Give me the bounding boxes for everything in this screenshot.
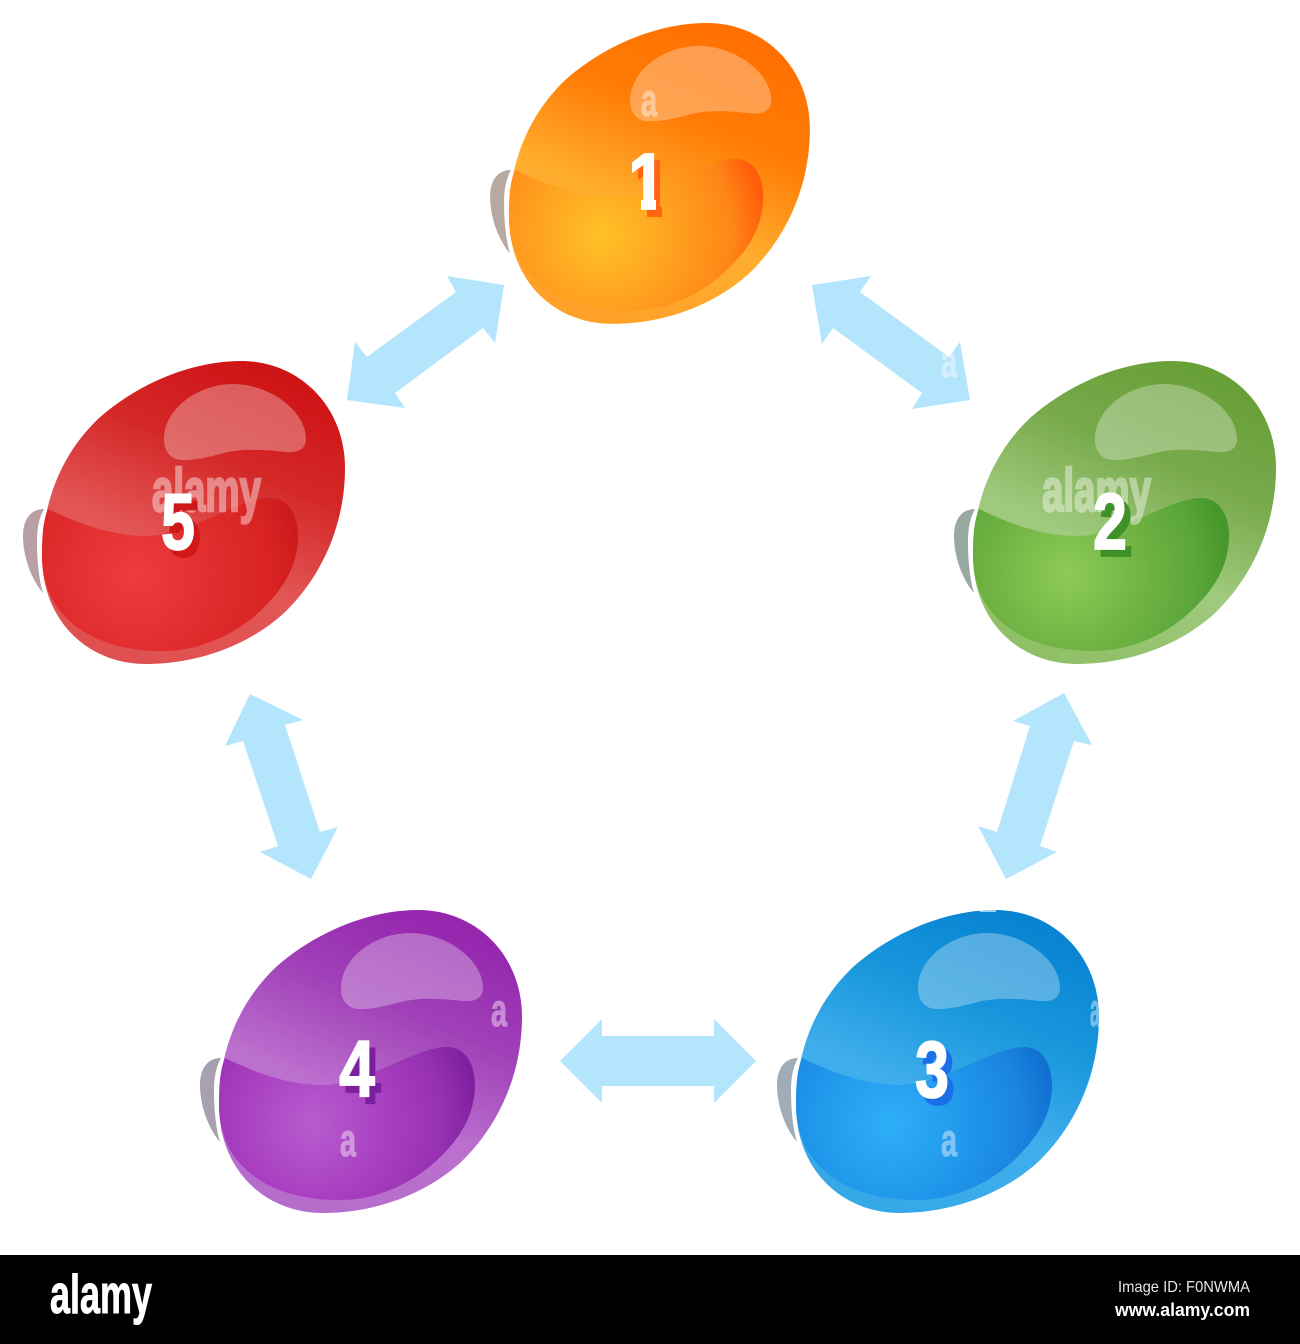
bubble 2: green: 2 <box>1099 485 1133 574</box>
bubble 4: purple <box>200 910 522 1213</box>
bubble 2: green: 2 <box>1093 478 1127 567</box>
bubble 4: purple: 4 <box>339 1024 375 1114</box>
bubble 3: blue: a <box>941 1114 957 1166</box>
bubble 4: purple: a <box>491 984 507 1036</box>
arrow: between 1 and 2 <box>812 276 970 409</box>
bubble 2: green <box>954 361 1276 664</box>
bubble 1: orange: a <box>641 74 657 126</box>
bubble 1: orange <box>490 23 810 324</box>
bubble 2: green: alamy <box>1042 457 1151 524</box>
bubble 4: purple: 4 <box>345 1031 381 1121</box>
bubble 3: blue: 3 <box>921 1033 955 1122</box>
bubble 3: blue <box>777 909 1100 1213</box>
bubble 4: purple: a <box>340 1114 356 1166</box>
bubble 5: red: alamy <box>152 457 261 524</box>
cycle diagram: a <box>1090 984 1100 1036</box>
bubble 1: orange: 1 <box>634 144 672 233</box>
watermark letter on arrow: a <box>941 335 957 387</box>
arrow: between 2 and 3 <box>978 693 1092 879</box>
footer bar <box>0 1255 1300 1344</box>
footer logo: alamy <box>50 1263 152 1325</box>
arrow: between 5 and 1 <box>347 276 504 408</box>
bubble 5: red: 5 <box>167 485 201 574</box>
arrow: between 3 and 4 <box>560 1019 756 1103</box>
arrow: between 5 and 4 <box>225 694 338 879</box>
bubble 1: orange: 1 <box>628 137 666 226</box>
image id: Image ID: F0NWMA <box>1118 1279 1250 1296</box>
website: www.alamy.com <box>1114 1300 1250 1320</box>
bubble 5: red: 5 <box>161 478 195 567</box>
bubble 5: red <box>23 361 345 664</box>
bubble 3: blue: 3 <box>915 1026 949 1115</box>
